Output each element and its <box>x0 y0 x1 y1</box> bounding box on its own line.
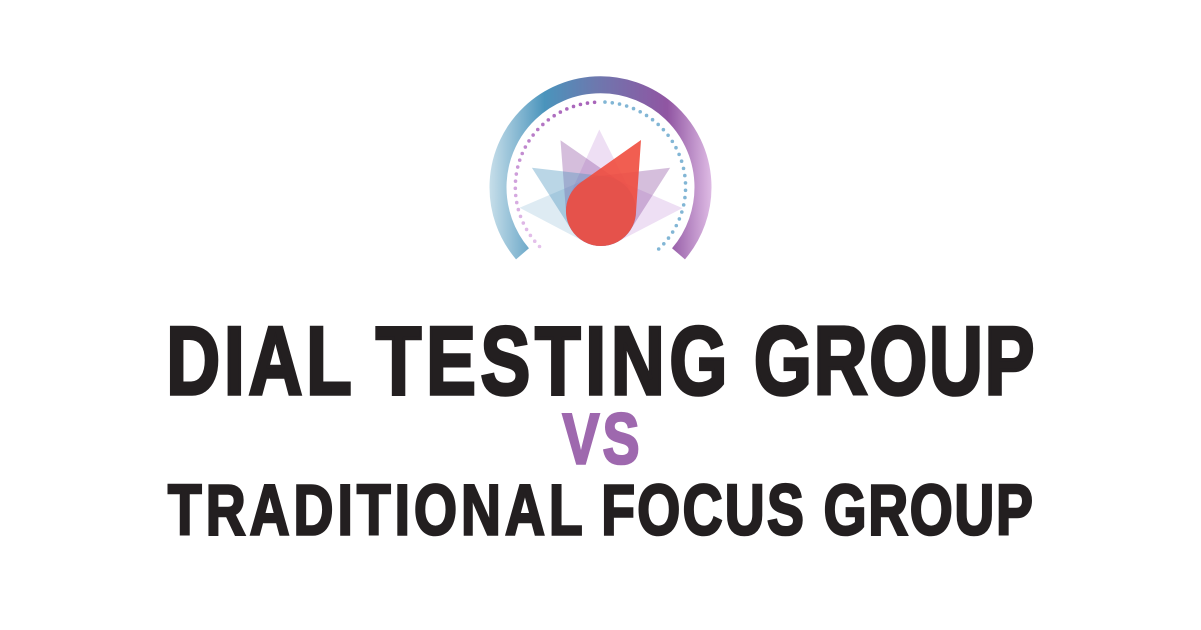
logo: dial with lotus <box>498 85 703 259</box>
vs label: VS <box>562 399 639 479</box>
icon: purple dotted scale <box>515 102 596 246</box>
title line: Dial Testing Group: DIAL <box>166 308 352 415</box>
icon: red drop <box>553 123 672 259</box>
title line: Dial Testing Group: GROUP <box>754 308 1034 415</box>
title line: Traditional Focus Group: FOCUS <box>601 470 804 550</box>
icon: blue dotted scale <box>603 102 686 249</box>
title line: Traditional Focus Group: GROUP <box>824 470 1033 550</box>
title line: Traditional Focus Group: TRADITIONAL <box>168 470 583 550</box>
icon: lotus petals <box>513 123 689 259</box>
title line: Dial Testing Group: TESTING <box>376 308 727 415</box>
icon: gradient dial arc <box>498 85 703 254</box>
